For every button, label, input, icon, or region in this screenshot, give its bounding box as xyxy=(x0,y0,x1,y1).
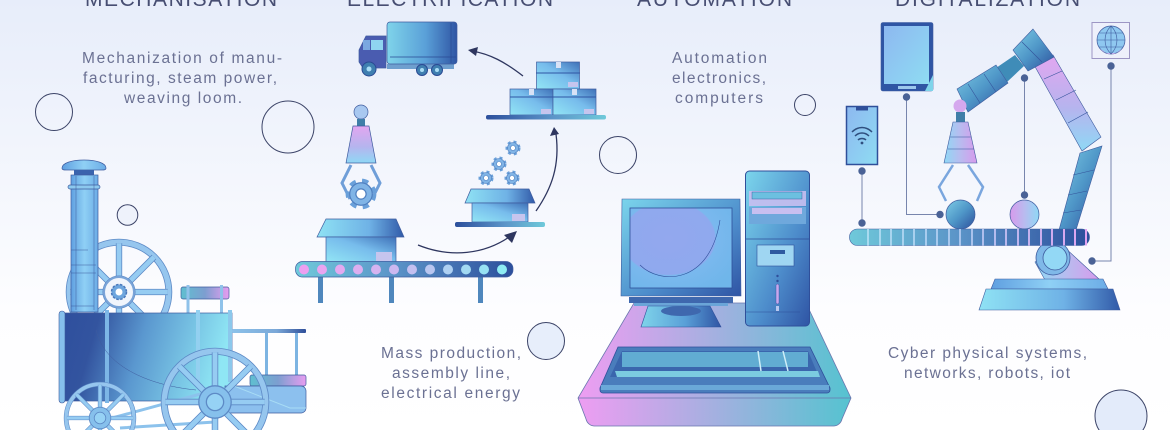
handle xyxy=(181,285,229,313)
text block: automation description: electronics, xyxy=(672,70,766,87)
small wheel xyxy=(66,384,134,430)
illustration: robot arm and devices xyxy=(846,22,1130,310)
flywheel xyxy=(69,242,169,342)
arrow: conveyor to box xyxy=(418,231,517,253)
sphere on belt, left xyxy=(946,200,975,229)
truck xyxy=(359,22,457,76)
desk xyxy=(578,303,851,426)
text block: mechanisation description: weaving loom. xyxy=(123,90,242,107)
robot arm xyxy=(954,29,1102,230)
chimney xyxy=(62,160,106,312)
text block: digitalization description xyxy=(888,345,1087,382)
connector lines xyxy=(858,62,1115,265)
arrow: box to stack xyxy=(536,127,559,211)
rail and tank xyxy=(225,329,306,413)
text block: automation description: Automation xyxy=(672,50,767,67)
robot base xyxy=(979,241,1120,310)
monitor xyxy=(621,199,741,327)
text block: digitalization description: networks, robots, iot xyxy=(904,365,1071,382)
phone with wifi xyxy=(846,106,878,164)
conveyor belt xyxy=(296,262,513,303)
arrow: stack to truck xyxy=(468,47,523,76)
striped belt xyxy=(850,229,1090,246)
text block: mechanisation description: facturing, steam power, xyxy=(83,70,277,87)
box on conveyor xyxy=(317,219,404,262)
robot gripper xyxy=(939,112,983,201)
stacked boxes xyxy=(486,62,606,120)
text block: electrification description xyxy=(381,345,521,402)
open box with gears xyxy=(455,142,545,227)
keyboard xyxy=(600,347,830,393)
text block: automation description xyxy=(672,50,767,107)
illustration: assembly line xyxy=(296,22,606,303)
text block: mechanisation description: Mechanization of manu- xyxy=(82,50,282,67)
text block: electrification description: assembly line, xyxy=(392,365,510,382)
tablet xyxy=(881,22,933,91)
decorative circles xyxy=(36,94,1147,430)
sphere on belt, right xyxy=(1010,200,1039,229)
large wheel xyxy=(164,351,266,430)
robot claw holding gear xyxy=(342,105,380,207)
chassis bars xyxy=(105,390,215,428)
globe icon xyxy=(1092,22,1130,58)
computer tower xyxy=(746,171,810,326)
text block: electrification description: electrical energy xyxy=(381,385,520,402)
text block: electrification description: Mass production, xyxy=(381,345,521,362)
text block: automation description: computers xyxy=(675,90,763,107)
boiler xyxy=(59,310,232,403)
illustration: computer workstation xyxy=(578,171,851,426)
text block: digitalization description: Cyber physical systems, xyxy=(888,345,1087,362)
text block: mechanisation description xyxy=(82,50,282,107)
illustration: steam engine xyxy=(59,160,306,430)
